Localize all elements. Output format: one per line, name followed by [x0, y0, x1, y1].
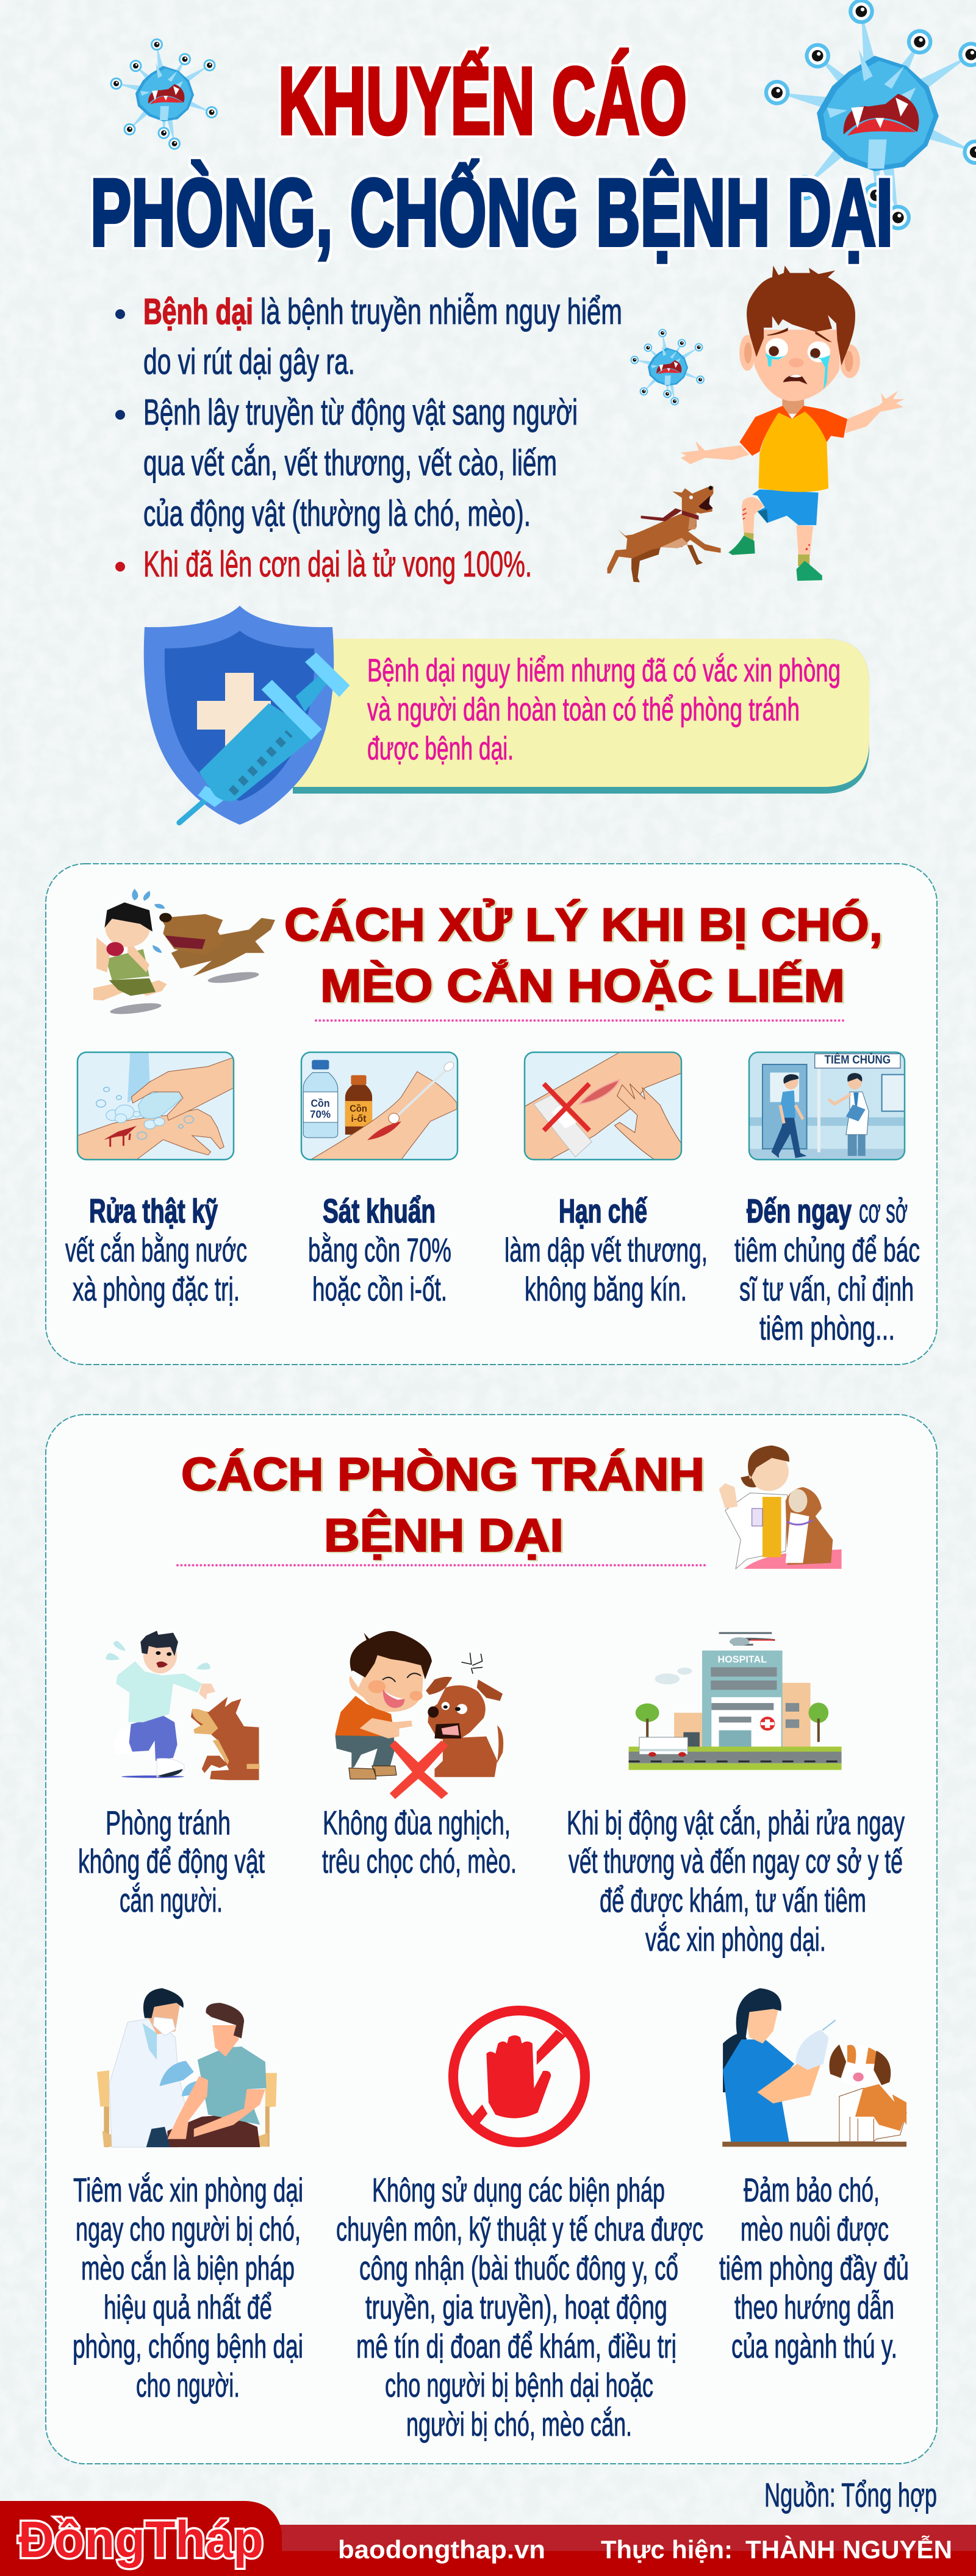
card: disinfect: [301, 1052, 458, 1160]
callout: vaccine message: được bệnh dại.: [367, 731, 514, 767]
card: avoid pressing wound: [523, 1052, 683, 1160]
text: avoid letting animals bite: không để động vật: [78, 1842, 265, 1880]
text: vaccinate people: Tiêm vắc xin phòng dại: [73, 2171, 303, 2209]
text: vaccinate people: ngay cho người bị chó,: [76, 2210, 301, 2248]
text: vaccinate people: cho người.: [136, 2366, 240, 2404]
card text: go immediately: cơ sở: [859, 1192, 908, 1230]
intro bullet list: Bệnh lây truyền từ động vật sang người: [143, 392, 578, 432]
icon: hospital: HOSPITAL: [718, 1655, 767, 1665]
illustration: crying boy and biting dog: [607, 265, 905, 583]
text: when bitten: [567, 1804, 905, 1958]
icon: dog chasing child: [93, 889, 275, 1016]
text: avoid letting animals bite: [78, 1804, 265, 1919]
card text: wash: Rửa thật kỹ: [89, 1192, 218, 1230]
icon: vet vaccinating dog: [722, 1988, 906, 2147]
icon: vet with dog: [719, 1446, 842, 1569]
callout: vaccine message: và người dân hoàn toàn có thể phòng tránh: [367, 692, 800, 728]
text: vaccinate pets: [719, 2171, 909, 2365]
text: do not use unproven methods: Không sử dụng các biện pháp: [372, 2171, 665, 2209]
icon: doctor vaccinating patient: [97, 1988, 277, 2147]
intro bullet list: của động vật (thường là chó, mèo).: [143, 493, 531, 534]
intro bullet list: do vi rút dại gây ra.: [143, 342, 355, 382]
text: do not tease: trêu chọc chó, mèo.: [322, 1842, 517, 1880]
card text: limit: không băng kín.: [525, 1270, 687, 1308]
icon: mini virus near boy: [630, 329, 705, 406]
text: do not tease: Không đùa nghịch,: [323, 1804, 511, 1842]
credit: Thực hiện:: [601, 2535, 733, 2564]
card text: wash: [65, 1192, 247, 1308]
heading: how to prevent: [181, 1449, 705, 1562]
website: baodongthap.vn: [338, 2535, 545, 2564]
text: vaccinate people: [73, 2171, 303, 2404]
card text: wash: xà phòng đặc trị.: [73, 1270, 240, 1308]
card text: go immediately: tiêm phòng...: [759, 1309, 895, 1347]
text: do not use unproven methods: truyền, gia truyền), hoạt động: [365, 2288, 667, 2326]
panel: how to prevent: [46, 1415, 937, 2464]
text: vaccinate pets: Đảm bảo chó,: [744, 2171, 880, 2209]
card: disinfect: Cồn: [310, 1098, 330, 1110]
card text: disinfect: hoặc cồn i-ốt.: [312, 1270, 447, 1308]
card text: go immediately: [734, 1192, 920, 1347]
icon: man running from dog: [106, 1631, 259, 1780]
text: do not tease: [322, 1804, 517, 1880]
heading: what to do: MÈO CẮN HOẶC LIẾM: [320, 960, 845, 1012]
card text: limit: Hạn chế: [559, 1192, 647, 1230]
card text: disinfect: bằng cồn 70%: [308, 1231, 451, 1269]
icon: small virus top left: [110, 38, 218, 150]
intro bullet list: Bệnh dại: [143, 292, 253, 332]
heading: how to prevent: BỆNH DẠI: [324, 1509, 564, 1562]
icon: stop hand prohibition sign: [453, 2011, 585, 2142]
icon: large virus top right: [764, 0, 976, 230]
card text: disinfect: [308, 1192, 451, 1308]
icon: boy teasing dog with red cross: [336, 1631, 503, 1799]
card: disinfect: 70%: [310, 1109, 331, 1121]
text: do not use unproven methods: cho người bị bệnh dại hoặc: [385, 2366, 653, 2404]
icon: shield with syringe: [144, 606, 350, 825]
card: wash wound: [77, 1052, 234, 1160]
intro bullet list: [115, 292, 622, 584]
panel: what to do when bitten: [46, 864, 937, 1365]
footer band: [0, 2501, 976, 2576]
title: [90, 48, 893, 266]
title: KHUYẾN CÁO: [278, 48, 687, 154]
card text: go immediately: Đến ngay: [747, 1192, 852, 1230]
credit: [601, 2535, 952, 2564]
text: do not use unproven methods: chuyên môn, kỹ thuật y tế chưa được: [336, 2210, 703, 2248]
text: do not use unproven methods: người bị chó, mèo cắn.: [406, 2405, 632, 2443]
card: disinfect: i-ốt: [351, 1113, 367, 1124]
text: vaccinate people: phòng, chống bệnh dại: [73, 2327, 303, 2365]
card text: limit: [504, 1192, 708, 1308]
text: avoid letting animals bite: cắn người.: [120, 1881, 223, 1919]
card: go to vaccination site: TIÊM CHỦNG: [825, 1053, 891, 1066]
text: vaccinate pets: mèo nuôi được: [741, 2210, 889, 2248]
intro bullet list: qua vết cắn, vết thương, vết cào, liếm: [143, 443, 557, 483]
heading: what to do: [284, 899, 883, 1012]
text: vaccinate people: hiệu quả nhất để: [104, 2288, 272, 2326]
text: vaccinate people: mèo cắn là biện pháp: [81, 2249, 295, 2287]
text: do not use unproven methods: [336, 2171, 703, 2443]
text: when bitten: vắc xin phòng dại.: [645, 1920, 826, 1958]
heading: what to do: CÁCH XỬ LÝ KHI BỊ CHÓ,: [284, 899, 883, 951]
card text: wash: vết cắn bằng nước: [65, 1231, 247, 1269]
intro bullet list: Khi đã lên cơn dại là tử vong 100%.: [143, 544, 532, 584]
card text: disinfect: Sát khuẩn: [323, 1192, 436, 1230]
card: disinfect: Cồn: [350, 1103, 367, 1114]
callout: vaccine message: [293, 639, 869, 794]
text: do not use unproven methods: mê tín dị đoan để khám, điều trị: [356, 2327, 676, 2365]
logo: ĐồngTháp: [18, 2511, 264, 2568]
text: do not use unproven methods: công nhận (bài thuốc đông y, cổ: [359, 2249, 678, 2287]
text: vaccinate pets: của ngành thú y.: [731, 2327, 897, 2365]
heading: how to prevent: CÁCH PHÒNG TRÁNH: [181, 1449, 705, 1501]
text: vaccinate pets: theo hướng dẫn: [734, 2288, 894, 2326]
icon: hospital: [629, 1633, 842, 1770]
card: go to vaccination site: [747, 1052, 907, 1161]
credit: THÀNH NGUYỄN: [745, 2535, 952, 2564]
intro bullet list: là bệnh truyền nhiễm nguy hiểm: [260, 292, 622, 332]
card text: limit: làm dập vết thương,: [504, 1231, 708, 1269]
text: avoid letting animals bite: Phòng tránh: [106, 1804, 231, 1842]
